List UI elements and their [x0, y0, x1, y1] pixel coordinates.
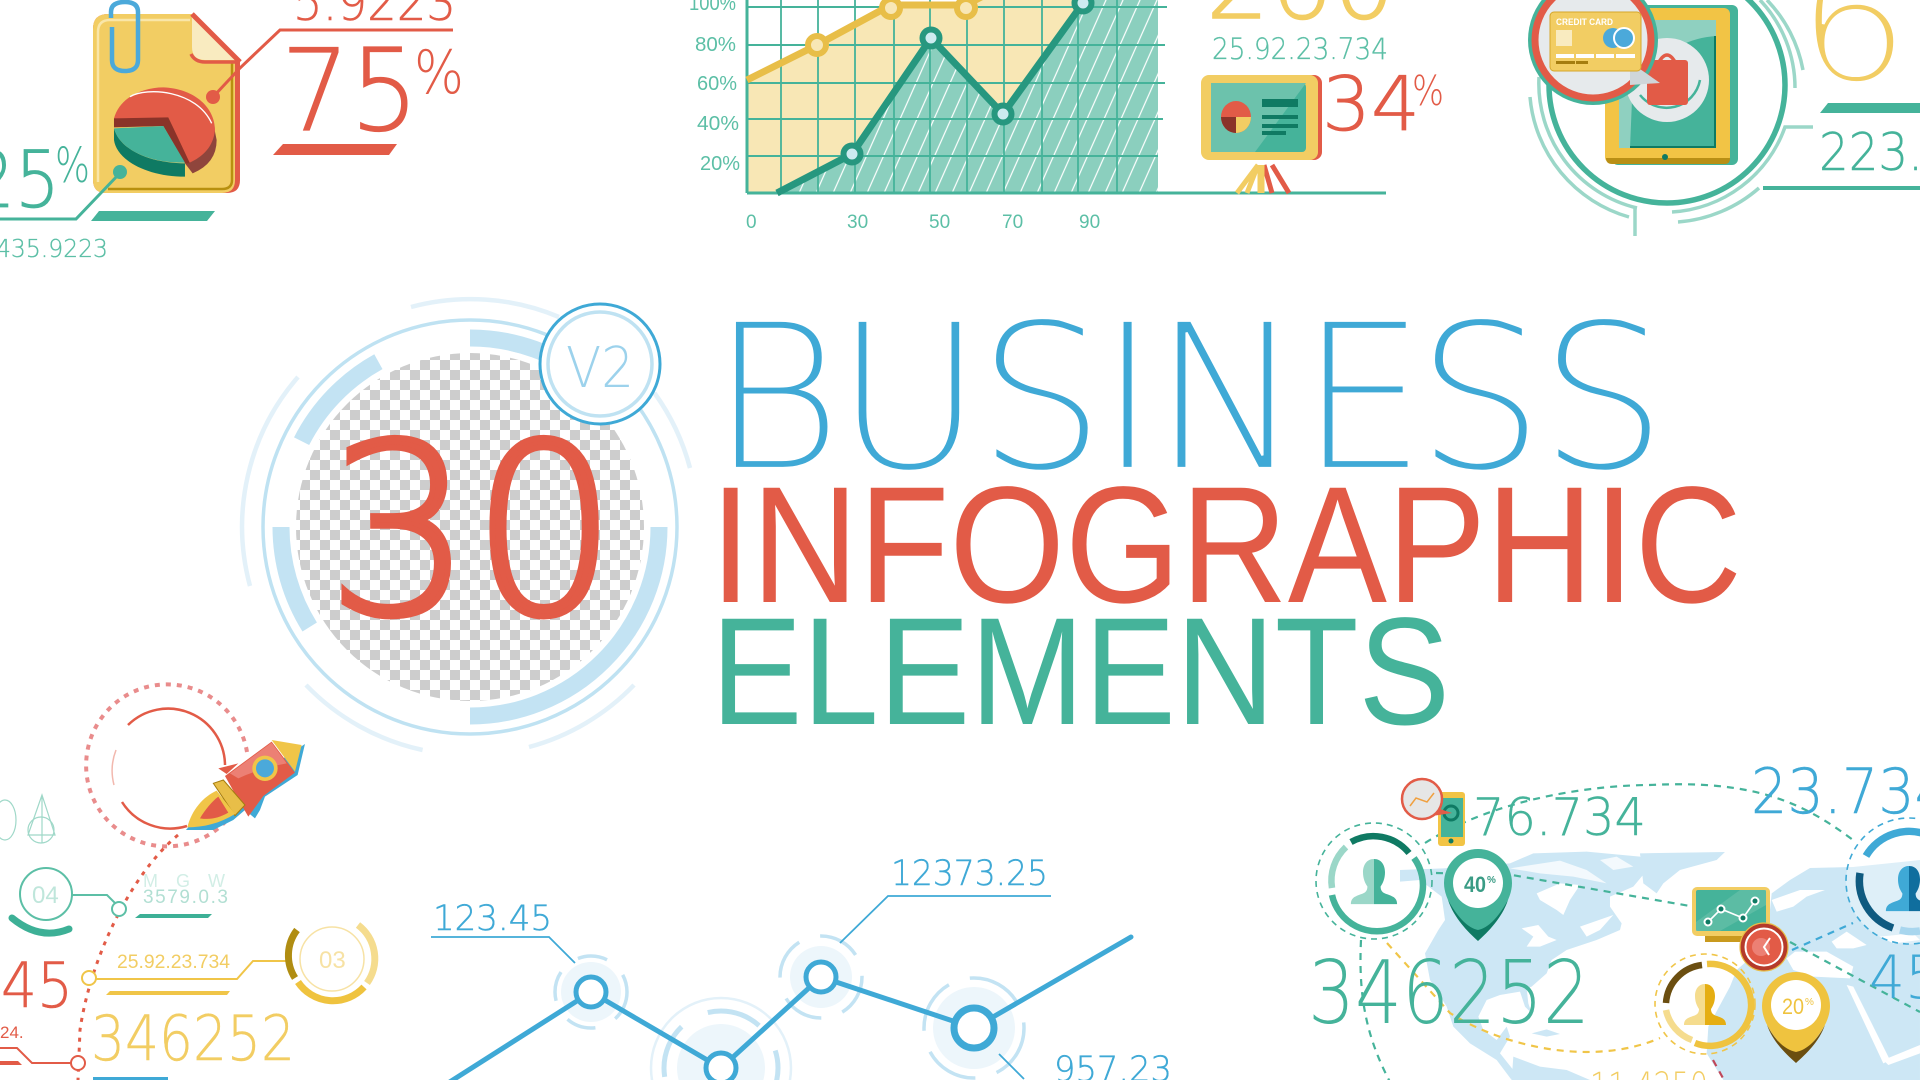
- node 04: [12, 868, 228, 933]
- stat: 346252 yellow: 346252: [91, 1002, 295, 1075]
- V2 badge: V2: [566, 336, 634, 401]
- line chart: top center: 30: [847, 212, 868, 233]
- callout: 25 percent: %: [55, 138, 90, 194]
- callout: 75 percent: 75: [281, 25, 419, 157]
- node 04: M G W: [143, 871, 225, 891]
- stat: 346252 green: 346252: [1308, 942, 1590, 1044]
- big number 30: 30: [327, 394, 617, 669]
- node: red: [0, 1023, 85, 1070]
- stat: 34 percent: %: [1412, 67, 1444, 115]
- line chart: top center: 70: [1002, 212, 1023, 233]
- line chart: top center: 40%: [697, 113, 739, 135]
- line chart: top center: 0: [746, 212, 757, 233]
- pin: 40 percent: [1444, 849, 1512, 941]
- pin: 40 percent: %: [1487, 875, 1496, 886]
- line chart: top center: 80%: [695, 34, 736, 56]
- line chart: top center: 50: [929, 212, 950, 233]
- pin: 20 percent: %: [1805, 997, 1814, 1008]
- blue line chart: bottom center: 12373.25: [891, 854, 1048, 894]
- node 04: 04: [32, 882, 59, 909]
- underline: [1763, 186, 1920, 190]
- pin: 40 percent: 40: [1464, 872, 1486, 897]
- callout: 25 percent: [0, 136, 215, 263]
- rocket orbit: [78, 684, 247, 1080]
- icon: pie: [114, 87, 217, 177]
- stat: 76.734: 76.734: [1473, 788, 1646, 848]
- world map: [1400, 852, 1920, 1080]
- title: INFOGRAPHIC: INFOGRAPHIC: [710, 453, 1742, 638]
- pin: 20 percent: 20: [1782, 994, 1804, 1019]
- pin: 20 percent: [1762, 972, 1830, 1063]
- line chart: top center: 60%: [697, 73, 737, 95]
- line chart: top center: [689, 0, 1386, 233]
- V2 badge: [540, 304, 660, 424]
- node 03: 25.92.23.734: [117, 952, 230, 973]
- bar: green: [1820, 103, 1920, 113]
- node 03: 03: [319, 947, 346, 974]
- top-left document with pie chart: [93, 2, 240, 193]
- callout: 75 percent: %: [414, 38, 464, 108]
- line chart: top center: 90: [1079, 212, 1100, 233]
- icon: rocket: [186, 740, 305, 830]
- user ring: blue: [1846, 818, 1920, 944]
- line chart: top center: 20%: [700, 153, 740, 175]
- blue line chart: bottom center: [431, 854, 1172, 1080]
- icon: clock: [1740, 923, 1788, 971]
- node 03: [82, 925, 375, 1001]
- icon: phone with bubble: [1402, 779, 1465, 846]
- icon: speech bubble with credit card: [1528, 0, 1660, 105]
- icon: monitor: [1692, 887, 1770, 942]
- node 04: 3579.0.3: [143, 887, 228, 908]
- title: BUSINESS: BUSINESS: [710, 280, 1667, 516]
- title: ELEMENTS: ELEMENTS: [711, 586, 1450, 757]
- network dashed links: [1360, 784, 1920, 1080]
- label: 25.92.23.734: 25.92.23.734: [1212, 32, 1388, 66]
- icon: paperclip: [111, 2, 138, 71]
- callout: 75 percent: [206, 0, 464, 157]
- stat: 34 percent: 34: [1322, 60, 1420, 148]
- central badge: [242, 299, 690, 750]
- blue line chart: bottom center: 123.45: [433, 899, 552, 939]
- node: red: 24.: [0, 1023, 24, 1042]
- icon: presentation board: [1201, 75, 1322, 193]
- icon: speech bubble with credit card: CREDIT CARD: [1556, 17, 1613, 28]
- user ring: green: [1316, 823, 1432, 939]
- faint glyph icons: [0, 795, 55, 843]
- bar: blue: [93, 1077, 168, 1080]
- user ring: yellow: [1655, 954, 1755, 1054]
- stat: 45 red: 45: [1, 949, 73, 1022]
- top-right ring with tablet: [1528, 0, 1813, 236]
